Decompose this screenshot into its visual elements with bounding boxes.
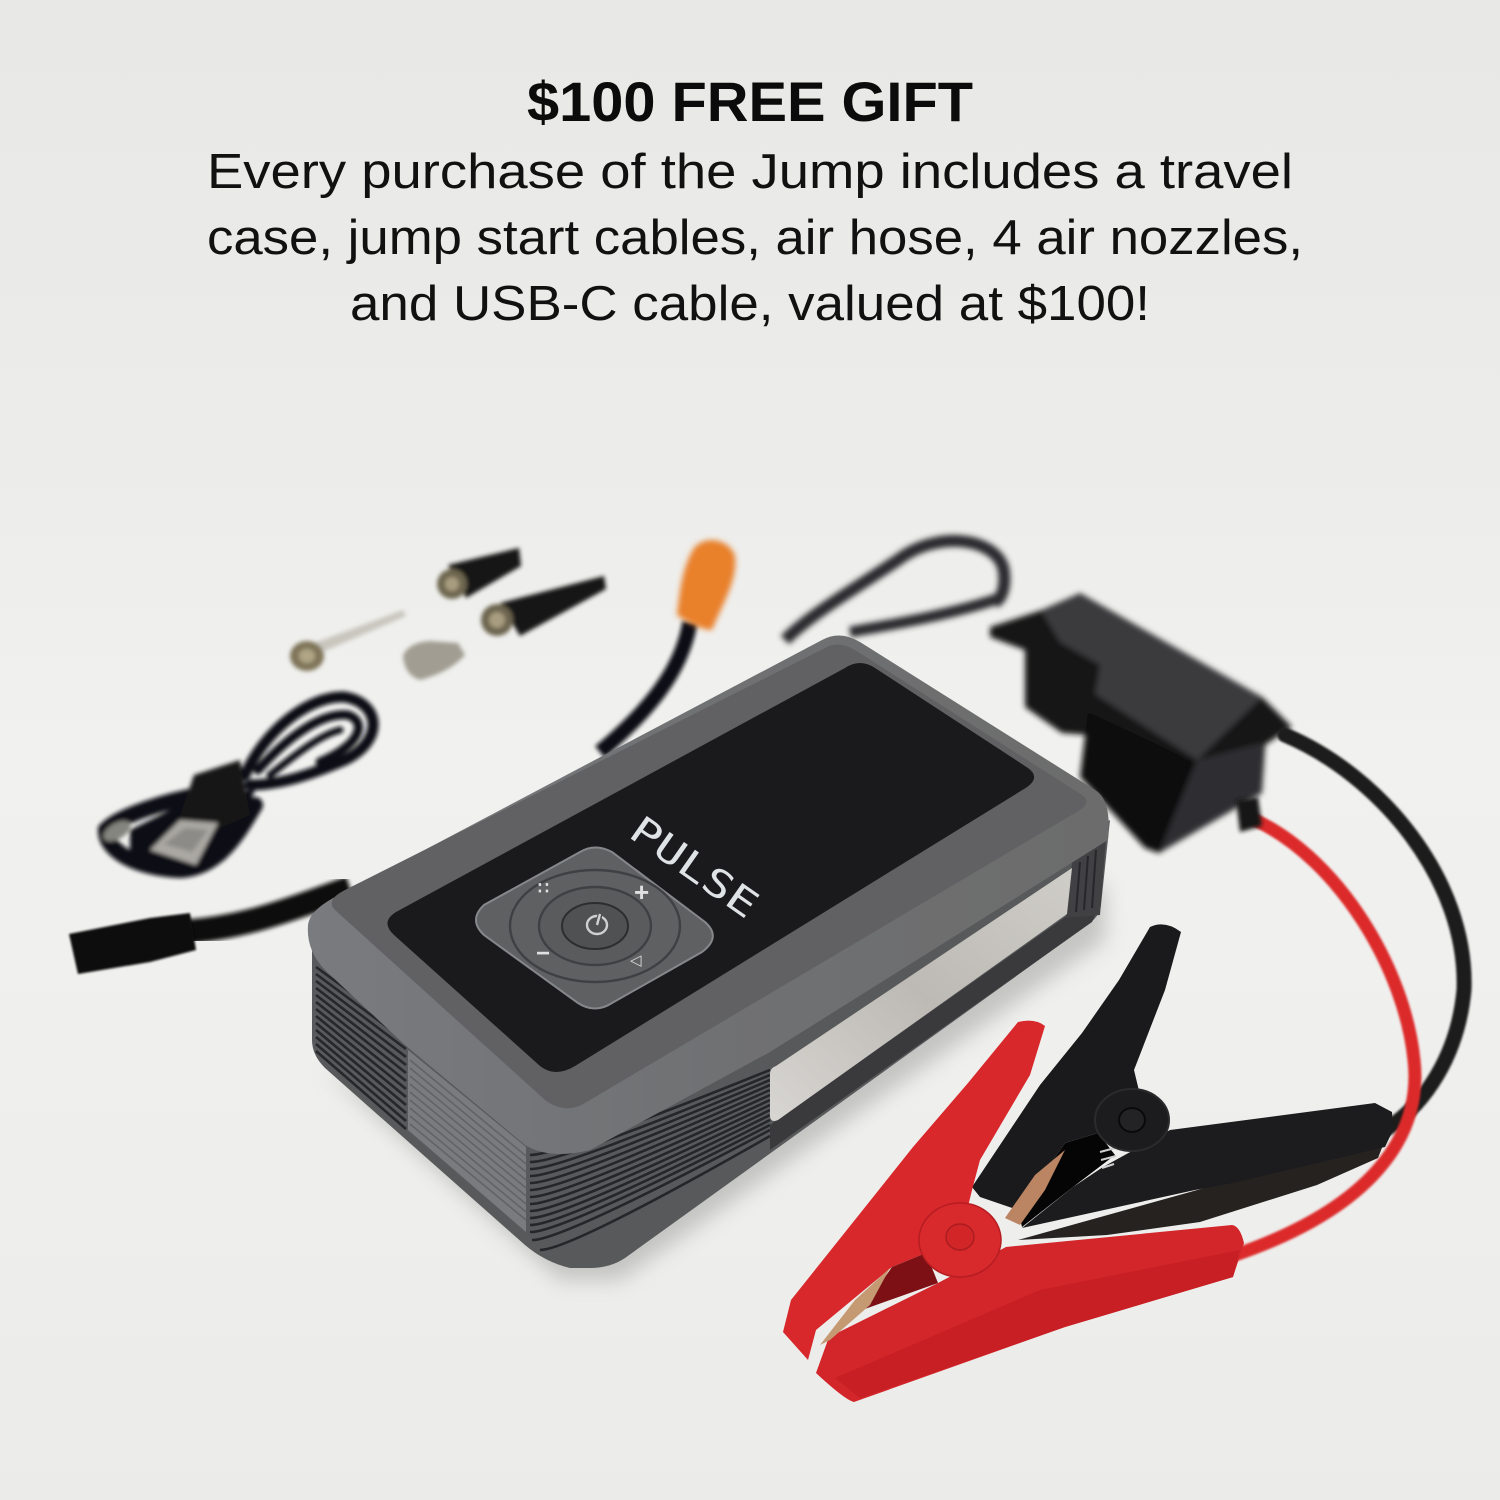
red clamp handle shade xyxy=(835,1250,1240,1398)
body text: case, jump start cables, air hose, 4 air nozzles, xyxy=(207,211,1303,265)
black clamp opening xyxy=(1018,1133,1115,1227)
button icons xyxy=(536,877,649,969)
button icons: − xyxy=(536,940,550,967)
right ribs xyxy=(530,1070,770,1250)
hose lower section xyxy=(180,888,350,932)
air hose xyxy=(69,540,735,974)
red jumper cable xyxy=(1235,820,1415,1255)
cable joint xyxy=(1236,797,1262,832)
copper teeth black xyxy=(1005,1150,1065,1225)
body text xyxy=(207,145,1303,331)
hose connector xyxy=(69,913,196,974)
button icons: ∷ xyxy=(538,879,549,898)
nozzle: brass adapter xyxy=(403,641,465,680)
red clamp opening xyxy=(862,1253,938,1310)
micro connector xyxy=(100,817,134,845)
jump starter device xyxy=(308,635,1110,1268)
red clamp pivot xyxy=(919,1203,1001,1277)
charger cable loop xyxy=(785,541,1004,640)
charger adapter block xyxy=(990,593,1292,853)
nozzle: long cone xyxy=(481,576,606,636)
hose upper section xyxy=(600,622,690,752)
red clamp xyxy=(783,1021,1244,1402)
black clamp pivot xyxy=(1095,1089,1169,1151)
nozzle: needle xyxy=(290,610,406,671)
control button pad xyxy=(476,848,713,1008)
USB-A metal plug xyxy=(150,820,218,865)
device lower body xyxy=(312,820,1110,1268)
red clamp jaw xyxy=(783,1021,1045,1360)
right end ribs xyxy=(1066,838,1106,918)
black clamp xyxy=(972,924,1393,1240)
work light xyxy=(770,868,1072,1121)
bevelled top edge xyxy=(308,635,1109,1154)
flat top rim xyxy=(332,644,1087,1108)
red clamp handle xyxy=(816,1225,1244,1402)
cable bundle fill xyxy=(130,790,255,870)
copper teeth red xyxy=(820,1268,890,1345)
black clamp handle xyxy=(1022,1103,1393,1228)
brand logo: PULSE xyxy=(622,807,767,927)
spring xyxy=(1100,1148,1116,1168)
orange hose tip xyxy=(677,540,735,630)
USB-A plug housing xyxy=(178,760,250,830)
button icons: ◁ xyxy=(630,952,642,969)
body text: Every purchase of the Jump includes a travel xyxy=(207,145,1293,199)
device shadow xyxy=(325,880,1105,1280)
black jumper cable xyxy=(1285,735,1464,1130)
ribbed grille panel xyxy=(408,1050,526,1232)
black panel xyxy=(387,663,1034,1072)
body text: and USB-C cable, valued at $100! xyxy=(350,277,1150,331)
left ribs xyxy=(316,967,406,1129)
nozzle: short cone xyxy=(437,548,521,599)
strip under work light xyxy=(770,905,1100,1150)
air nozzle accessories xyxy=(290,548,606,680)
USB-C cable coil xyxy=(100,697,373,870)
heading: $100 FREE GIFT xyxy=(527,70,973,133)
power button xyxy=(562,903,628,949)
black clamp lower shadow grip xyxy=(1018,1140,1385,1240)
button icons: + xyxy=(634,877,649,907)
black clamp jaw xyxy=(972,924,1181,1210)
